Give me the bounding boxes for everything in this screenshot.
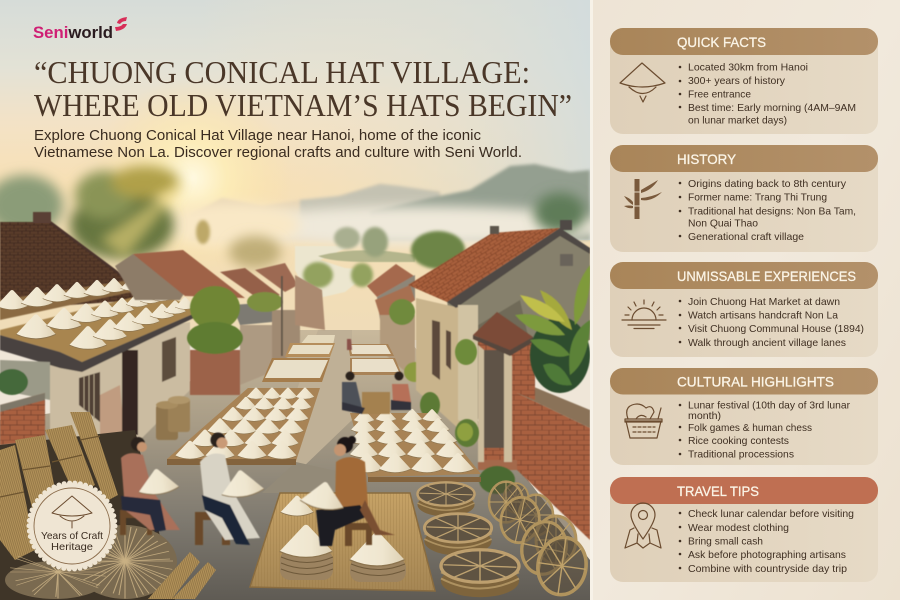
panel: illustrated village scene (0, 0, 610, 600)
artisan woman in white ao dai (195, 432, 265, 545)
list: unmissable experiences: Watch artisans handcraft Non La (688, 310, 838, 322)
trees (0, 166, 586, 288)
badge: Years of Craft Heritage: Heritage (51, 541, 93, 553)
panel: quick facts (610, 28, 878, 134)
gatehouse and brick wall (455, 312, 590, 540)
list: history: Non Quai Thao (688, 218, 758, 230)
heading: cultural highlights: CULTURAL HIGHLIGHTS (677, 374, 834, 390)
list: unmissable experiences: Join Chuong Hat Market at dawn (688, 296, 840, 308)
badge: Years of Craft Heritage: Years of Craft (41, 530, 103, 542)
heading: history (610, 145, 878, 172)
subtitle (34, 128, 522, 161)
panel: travel tips (610, 477, 878, 582)
badge: Years of Craft Heritage (29, 483, 115, 569)
heading: cultural highlights (610, 368, 878, 394)
heading: history: HISTORY (677, 151, 737, 167)
panel: history (610, 145, 878, 252)
logo: Seniworld: Seniworld (33, 23, 113, 42)
list: history: Origins dating back to 8th century (688, 178, 847, 190)
list: history (679, 178, 856, 243)
list: unmissable experiences: Walk through ancient village lanes (688, 337, 846, 349)
far drying trays (262, 335, 402, 382)
tray of hats left (167, 388, 320, 465)
title: WHERE OLD VIETNAM’S HATS BEGIN” (34, 87, 572, 123)
small bushes (420, 392, 515, 494)
stacked baskets by left house (156, 396, 190, 440)
large right house (408, 220, 590, 430)
icon: basket of food (625, 404, 662, 438)
icon: badge hat (52, 496, 92, 528)
list: cultural highlights: month) (688, 410, 721, 422)
list: unmissable experiences: Visit Chuong Communal House (1894) (688, 323, 864, 335)
banana plant (515, 265, 590, 393)
icon: sunrise (622, 300, 666, 328)
artisan woman in pink ao dai (120, 437, 180, 535)
list: travel tips: Wear modest clothing (688, 522, 789, 534)
heading: quick facts: QUICK FACTS (677, 34, 766, 50)
river (295, 246, 415, 300)
list: travel tips (679, 508, 854, 575)
list: cultural highlights: Traditional processions (688, 448, 794, 460)
title: “CHUONG CONICAL HAT VILLAGE: (34, 54, 530, 90)
icon: map pin (625, 503, 661, 548)
heading: unmissable experiences: UNMISSABLE EXPERIENCES (677, 268, 856, 284)
icon: logo swoosh (115, 17, 127, 31)
heading: unmissable experiences (610, 262, 878, 289)
title (34, 54, 572, 123)
icon: conical hat (620, 63, 665, 102)
left house (0, 212, 202, 445)
list: cultural highlights (679, 400, 850, 460)
row of village houses left (115, 250, 300, 395)
list: unmissable experiences (679, 296, 864, 349)
straw bundles (0, 412, 216, 600)
list: quick facts: 300+ years of history (688, 75, 786, 87)
artisan woman in brown ao dai (299, 436, 395, 546)
list: travel tips: Check lunar calendar before visiting (688, 508, 854, 520)
tray of hats right (350, 409, 481, 482)
list: cultural highlights: Rice cooking contests (688, 435, 789, 447)
list: quick facts: on lunar market days) (688, 114, 787, 126)
heading: travel tips: TRAVEL TIPS (677, 483, 759, 499)
sun rays (98, 184, 185, 259)
list: cultural highlights: Lunar festival (10th day of 3rd lunar (688, 400, 850, 412)
list: history: Former name: Trang Thi Trung (688, 192, 827, 204)
heading: quick facts (610, 28, 878, 55)
list: travel tips: Combine with countryside day trip (688, 563, 847, 575)
list: quick facts: Located 30km from Hanoi (688, 62, 808, 74)
hats drying on left roof (0, 278, 195, 349)
woven hat frames (418, 482, 590, 598)
logo: Seniworld (33, 17, 127, 42)
ground and stone path (0, 330, 590, 600)
subtitle: Vietnamese Non La. Discover regional crafts and culture with Seni World. (34, 145, 522, 161)
panel: unmissable experiences (610, 262, 878, 357)
panel: parchment sidebar (590, 0, 900, 600)
woven mat with hat stacks (250, 493, 435, 591)
subtitle: Explore Chuong Conical Hat Village near Hanoi, home of the iconic (34, 128, 481, 144)
list: history: Traditional hat designs: Non Ba Tam, (688, 206, 856, 218)
sky (0, 0, 590, 340)
list: quick facts: Best time: Early morning (4AM–9AM (688, 102, 856, 114)
list: travel tips: Ask before photographing artisans (688, 549, 846, 561)
icon: bamboo (624, 179, 662, 219)
heading: travel tips (610, 477, 878, 504)
distant mountains (160, 164, 610, 247)
list: history: Generational craft village (688, 231, 804, 243)
list: cultural highlights: Folk games & human chess (688, 422, 812, 434)
panel: cultural highlights (610, 368, 878, 465)
far right village houses (295, 264, 426, 382)
two villagers seated mid-lane (342, 339, 411, 414)
list: quick facts (679, 62, 856, 126)
list: travel tips: Bring small cash (688, 536, 763, 548)
list: quick facts: Free entrance (688, 88, 751, 100)
